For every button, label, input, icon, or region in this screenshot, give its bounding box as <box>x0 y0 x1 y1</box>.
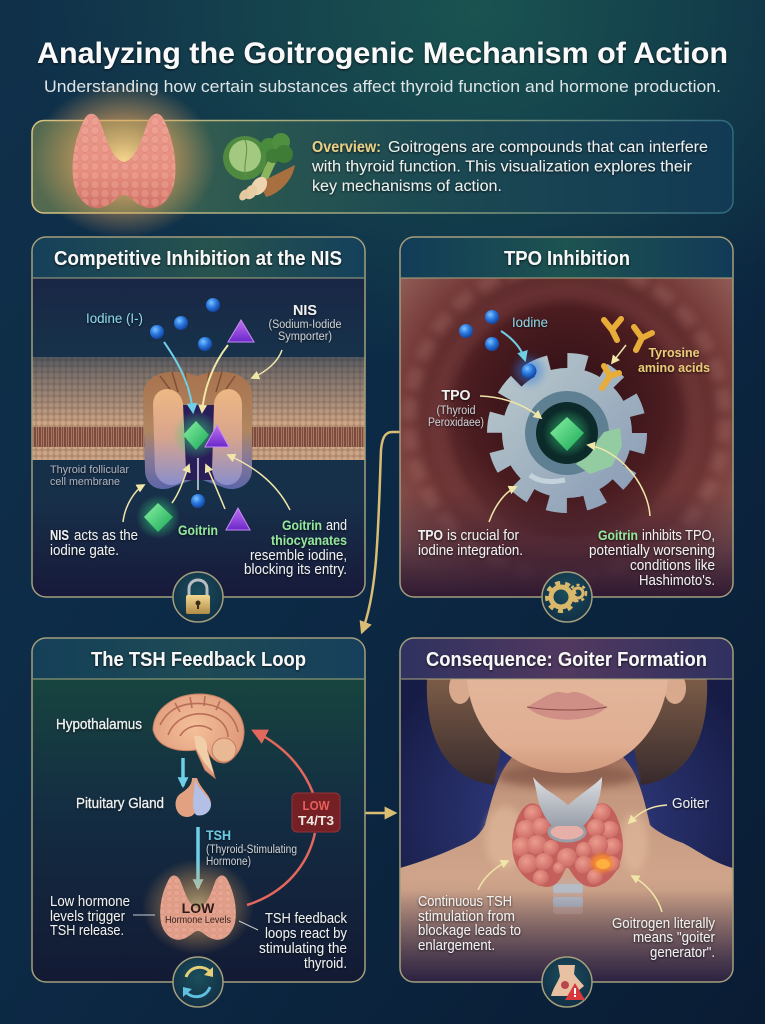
NIS channel protein <box>143 371 252 489</box>
trachea <box>553 878 583 914</box>
labels: Goiter <box>672 796 709 812</box>
labels: stimulating the <box>259 941 347 957</box>
labels: (Thyroid <box>436 405 476 417</box>
labels: Thyroid follicular <box>50 464 129 476</box>
feedback arc <box>247 731 315 905</box>
labels: Goitrin <box>178 523 218 538</box>
labels: stimulation from <box>418 909 515 925</box>
labels: NIS <box>293 303 317 319</box>
overview text <box>311 139 708 195</box>
leader lines <box>133 915 258 930</box>
labels: TSH release. <box>50 923 124 939</box>
labels: potentially worsening <box>589 543 715 559</box>
labels <box>50 303 347 578</box>
panel: goiter formation <box>400 638 733 1007</box>
labels: resemble iodine, <box>250 548 347 564</box>
labels: conditions like <box>630 558 715 574</box>
labels: Peroxidaee) <box>428 417 484 429</box>
labels: (Thyroid-Stimulating <box>206 844 297 856</box>
heading: Competitive Inhibition at the NIS <box>54 248 342 270</box>
labels: iodine integration. <box>418 543 523 559</box>
labels: Iodine (I-) <box>86 310 143 326</box>
ears <box>449 680 686 704</box>
overview text: Goitrogens are compounds that can interfere <box>388 139 708 156</box>
labels: Hormone) <box>206 856 251 868</box>
labels: acts as the <box>74 528 138 544</box>
labels: cell membrane <box>50 476 120 488</box>
labels: Symporter) <box>278 331 332 343</box>
icon: padlock badge <box>173 572 223 622</box>
labels: Goitrogen literally <box>612 916 716 932</box>
labels: amino acids <box>638 360 710 375</box>
overview text: Overview: <box>312 139 381 156</box>
labels: Goitrin <box>282 517 322 533</box>
tyrosine amino acids <box>602 319 652 388</box>
goiter bulges <box>485 806 648 873</box>
overview text: with thyroid function. This visualization explores their <box>311 158 692 176</box>
labels: and <box>326 518 347 534</box>
labels: thyroid. <box>304 956 347 972</box>
labels <box>50 717 348 972</box>
labels: levels trigger <box>50 909 125 925</box>
thyroid: low hormone levels: Hormone Levels <box>165 914 231 926</box>
labels: generator". <box>650 945 715 961</box>
chin shadow <box>497 764 637 788</box>
thyroid cartilage <box>533 777 602 841</box>
heading: The TSH Feedback Loop <box>91 649 306 671</box>
LOW T4/T3 badge: T4/T3 <box>298 813 334 828</box>
thyroid: low hormone levels: LOW <box>182 900 215 916</box>
labels: Goitrin <box>598 527 638 543</box>
labels: Hypothalamus <box>56 717 142 733</box>
arrows <box>480 331 650 522</box>
icon: refresh badge <box>173 957 223 1007</box>
panel: TPO inhibition <box>400 237 733 622</box>
neck and shoulders <box>400 750 733 982</box>
labels: Pituitary Gland <box>76 796 164 812</box>
panel: overview <box>32 82 733 238</box>
labels: blockage leads to <box>418 923 521 939</box>
labels: Continuous TSH <box>418 894 512 910</box>
labels: enlargement. <box>418 938 495 954</box>
TPO gear enzyme <box>496 362 638 504</box>
labels: inhibits TPO, <box>642 528 715 544</box>
labels: Tyrosine <box>648 345 700 360</box>
iodine particles <box>150 298 220 508</box>
arrows <box>123 342 290 522</box>
labels: is crucial for <box>447 528 519 544</box>
thiocyanate triangles <box>205 320 254 530</box>
membrane <box>32 357 365 460</box>
hair <box>427 679 707 785</box>
LOW T4/T3 badge: LOW <box>302 798 330 813</box>
heading: Consequence: Goiter Formation <box>426 649 707 671</box>
icon: thyroid gland <box>32 82 216 238</box>
labels: means "goiter <box>633 930 715 946</box>
labels: TSH feedback <box>265 911 348 927</box>
pituitary gland <box>176 778 211 817</box>
labels: Iodine <box>512 314 548 330</box>
labels: TPO <box>442 388 470 404</box>
icon: gear badge <box>542 572 592 622</box>
icon: neck warning badge <box>542 957 592 1007</box>
labels: blocking its entry. <box>244 562 347 578</box>
labels <box>418 796 716 961</box>
labels: NIS <box>50 528 69 544</box>
arrow: TSH loop to goiter <box>365 812 395 814</box>
face <box>467 679 668 773</box>
arrow: TPO to TSH loop connector <box>362 432 400 632</box>
labels: TPO <box>418 528 443 544</box>
panel: TSH feedback loop <box>32 638 365 1007</box>
heading: TPO Inhibition <box>504 248 630 270</box>
arrows: hypothalamus and TSH <box>183 758 198 888</box>
labels: Low hormone <box>50 894 130 910</box>
subtitle: Understanding how certain substances affect thyroid function and hormone production. <box>44 77 721 96</box>
brain: hypothalamus <box>153 694 244 778</box>
labels: loops react by <box>265 926 348 942</box>
overview text: key mechanisms of action. <box>312 178 502 195</box>
LOW T4/T3 badge <box>292 793 340 832</box>
labels: iodine gate. <box>50 543 119 559</box>
enlarged thyroid <box>512 803 623 887</box>
panel: competitive inhibition at the NIS <box>32 237 365 622</box>
icon: goitrogenic vegetables <box>223 133 295 202</box>
labels: (Sodium-Iodide <box>268 319 342 331</box>
labels <box>418 314 715 589</box>
lips <box>527 692 607 720</box>
goitrin diamonds <box>136 411 220 539</box>
labels: Hashimoto's. <box>639 573 715 589</box>
labels: thiocyanates <box>271 532 347 548</box>
thyroid: low hormone levels <box>142 859 254 955</box>
arrows <box>478 805 667 912</box>
iodine particles <box>459 310 543 385</box>
title: Analyzing the Goitrogenic Mechanism of Action <box>37 37 728 70</box>
labels: TSH <box>206 827 231 843</box>
